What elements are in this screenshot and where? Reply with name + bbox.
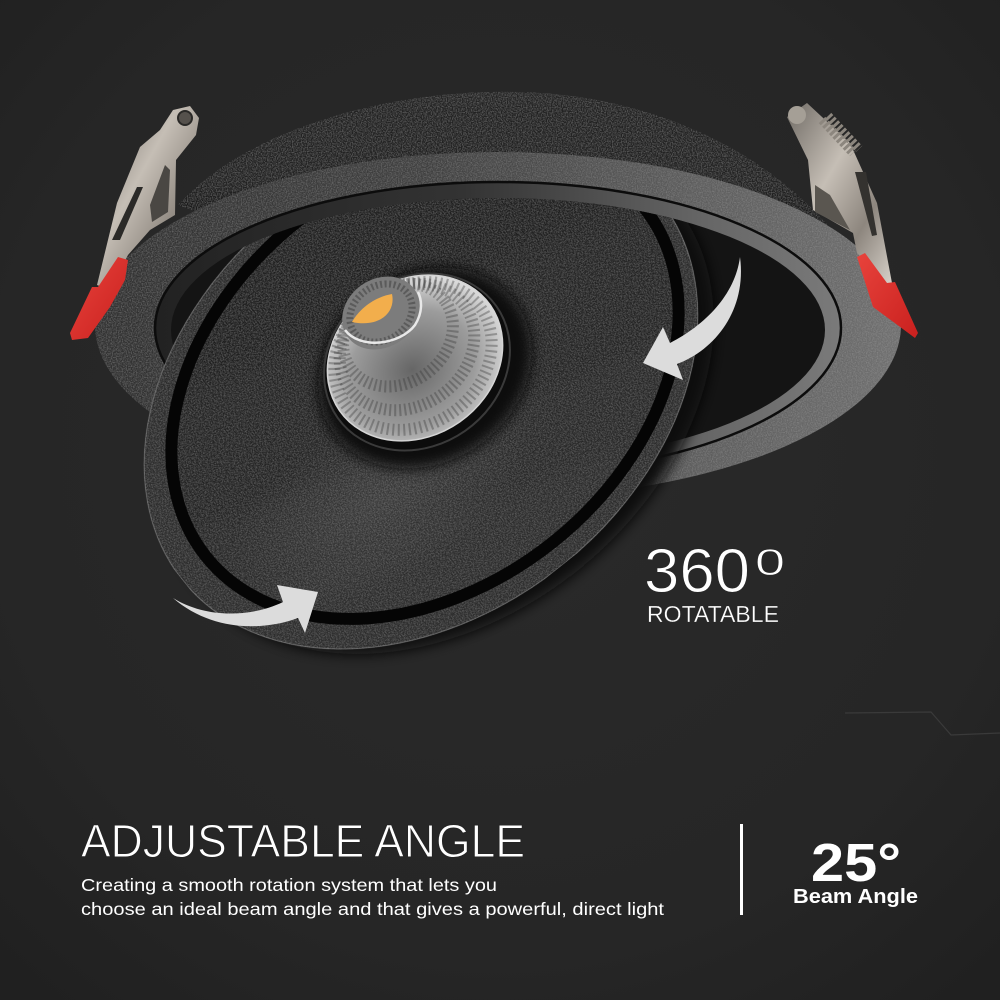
right red tab <box>857 253 918 338</box>
heading: ADJUSTABLE ANGLE <box>81 815 525 867</box>
beam angle stat <box>793 833 918 908</box>
bezel <box>289 238 545 486</box>
front mounting ring <box>95 152 901 498</box>
callout: 360 rotatable <box>644 537 785 627</box>
bezel shadow <box>279 227 571 509</box>
ring inner lip <box>155 182 841 474</box>
divider <box>740 824 743 915</box>
degree mark: 0 <box>755 542 785 583</box>
lamp reflector <box>279 227 571 509</box>
disc dome <box>178 198 672 613</box>
left red tab <box>70 257 128 340</box>
description text: Creating a smooth rotation system that lets you <box>81 875 497 895</box>
LED chip <box>352 294 393 323</box>
rotatable label: ROTATABLE <box>647 601 779 627</box>
dark opening <box>171 198 825 462</box>
disc outer band <box>144 198 698 650</box>
description text: choose an ideal beam angle and that gives a powerful, direct light <box>81 899 664 919</box>
dome highlight <box>290 464 468 564</box>
beam angle label: Beam Angle <box>793 886 918 908</box>
inner cup <box>328 262 434 364</box>
product photo: rotatable downlight <box>70 92 918 660</box>
right rotation arrow <box>643 257 741 380</box>
bottom rotation arrow <box>173 585 318 633</box>
disc shadow <box>236 208 714 660</box>
right spring clip <box>787 103 918 338</box>
back rim of housing <box>178 92 840 330</box>
black groove <box>165 211 685 625</box>
360 number: 360 <box>644 537 750 606</box>
reflector cone <box>295 241 535 475</box>
description text <box>81 875 664 919</box>
tilted disc <box>144 198 714 660</box>
25 degree value: 25° <box>811 833 901 893</box>
left spring clip <box>70 106 199 340</box>
